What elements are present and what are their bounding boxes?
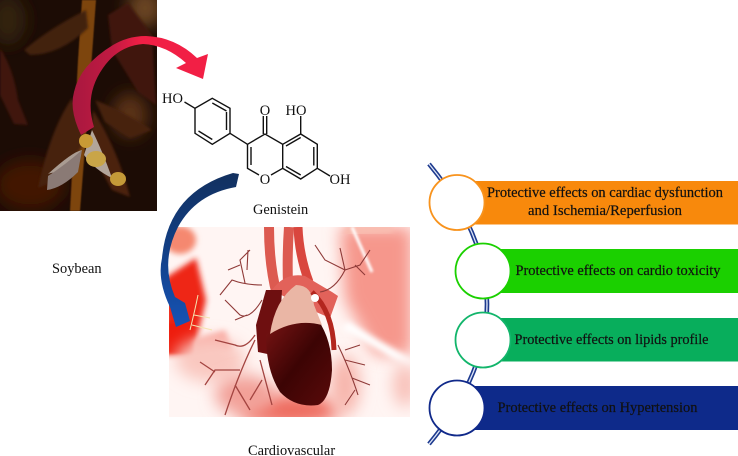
photo: heart illustration <box>164 226 417 426</box>
chemical structure: genistein <box>162 91 351 188</box>
panel: cardio toxicity: Protective effects on cardio toxicity <box>516 263 721 279</box>
panel: cardio toxicity <box>456 244 738 298</box>
panel: cardiac dysfunction and ischemia/reperfusion: and Ischemia/Reperfusion <box>528 203 682 219</box>
chemical structure: genistein: O <box>260 103 270 119</box>
label: Genistein: Genistein <box>253 202 308 218</box>
arrow: soybean to genistein (red) <box>73 36 208 135</box>
chemical structure: genistein: OH <box>330 172 351 188</box>
arrow: genistein to cardiovascular (blue) <box>161 173 239 327</box>
panel: cardiac dysfunction and ischemia/reperfusion: Protective effects on cardiac dysfunction <box>487 185 723 201</box>
photo: soybean pods <box>0 0 163 211</box>
chemical structure: genistein: O <box>260 172 270 188</box>
label: Soybean: Soybean <box>52 261 102 277</box>
connector: curved line through circles <box>429 164 487 444</box>
panel: hypertension: Protective effects on Hypertension <box>498 400 698 416</box>
panel: lipids profile: Protective effects on lipids profile <box>514 332 708 348</box>
chemical structure: genistein: HO <box>162 91 183 107</box>
panel: hypertension <box>430 380 738 436</box>
panel: cardiac dysfunction and ischemia/reperfusion <box>430 175 738 230</box>
chemical structure: genistein: HO <box>286 103 306 119</box>
panel: lipids profile <box>456 312 738 368</box>
